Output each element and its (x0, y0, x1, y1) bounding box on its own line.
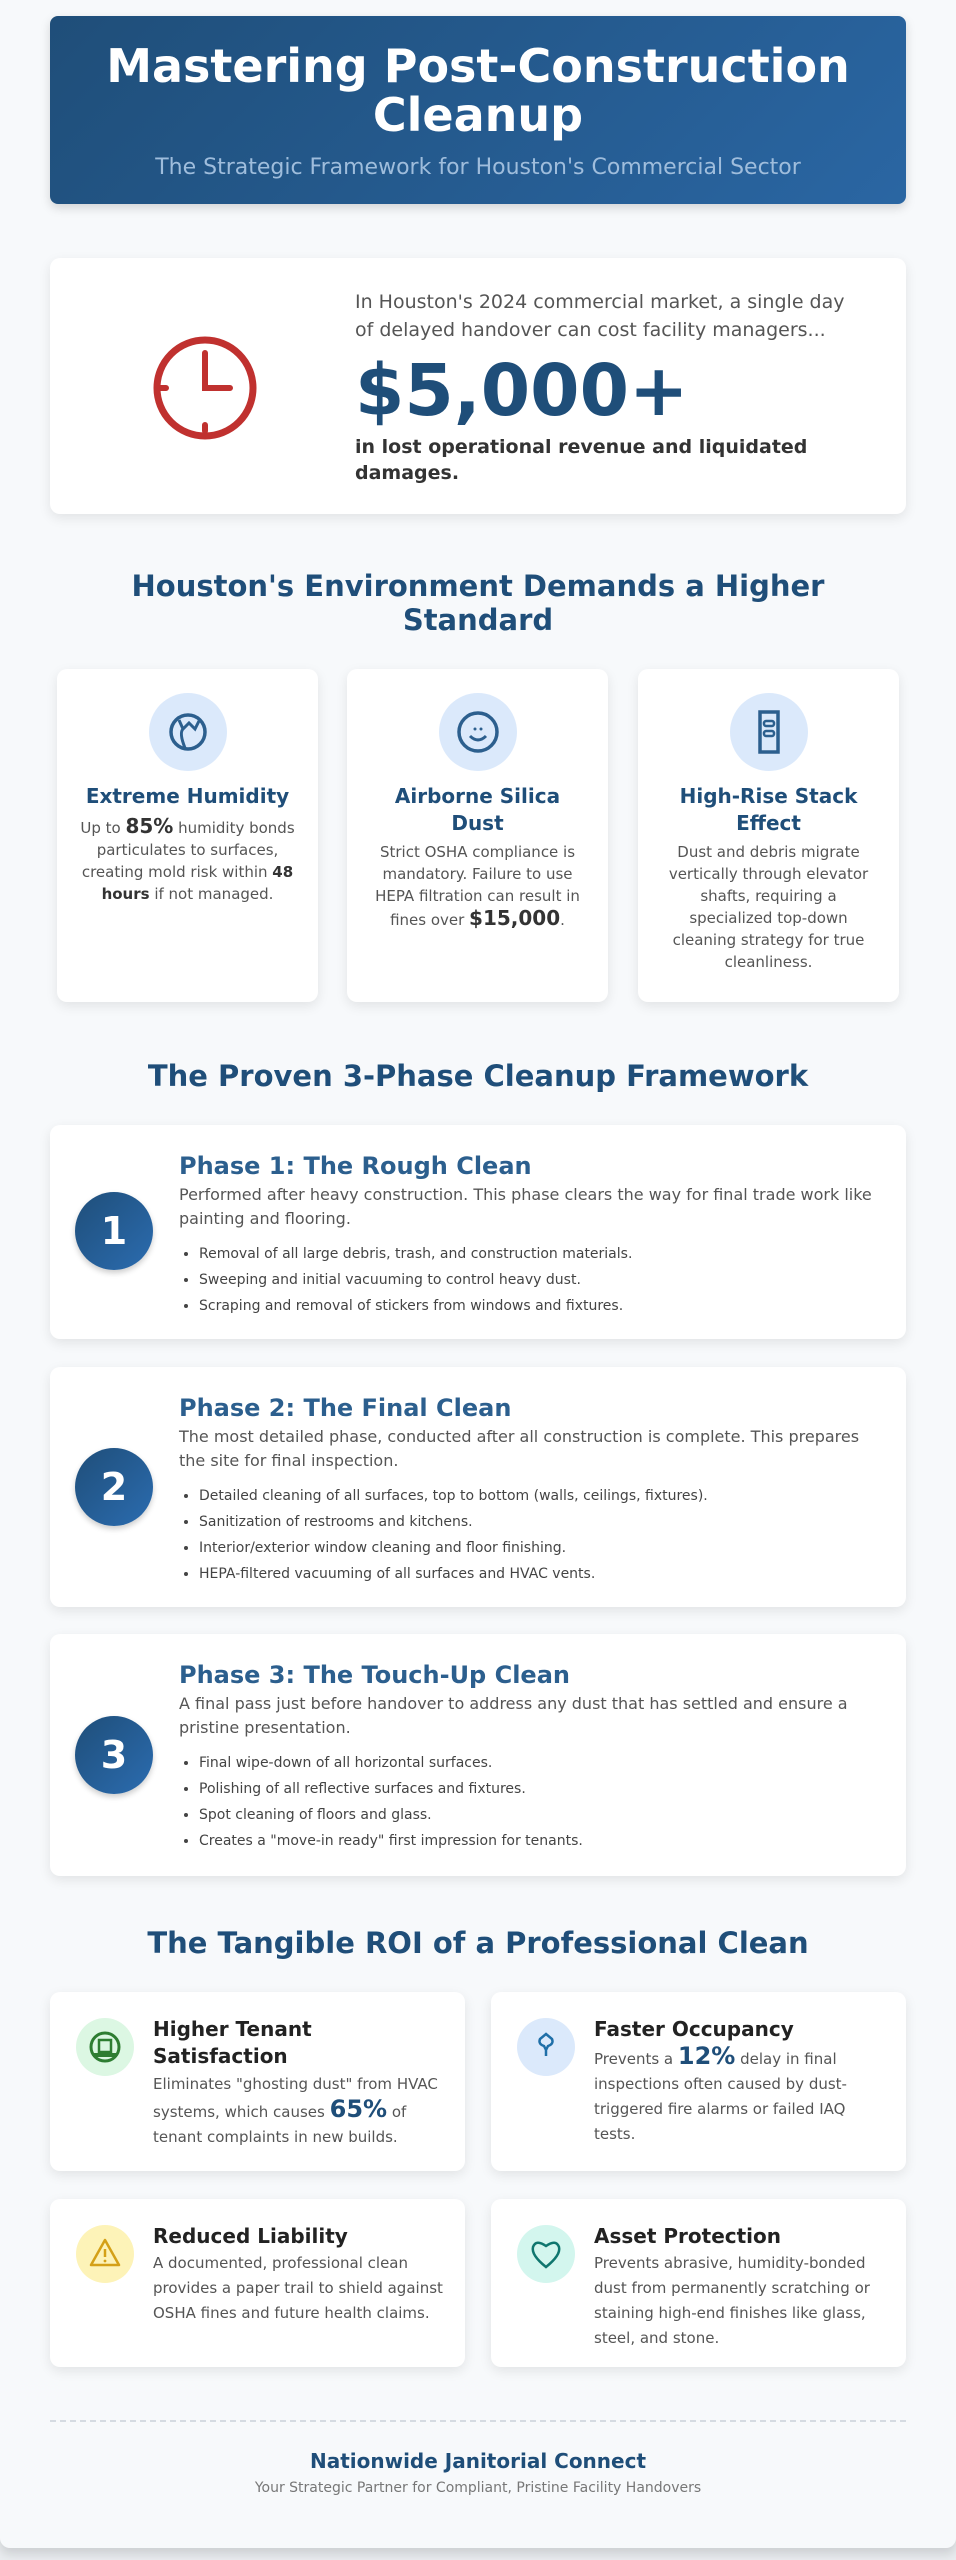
panel: phase 2: Interior/exterior window cleaning and floor finishing. (199, 1540, 566, 1556)
panel: silica (347, 669, 608, 1002)
panel: reduced liability (50, 2199, 465, 2367)
panel: phase 1: Sweeping and initial vacuuming to control heavy dust. (199, 1272, 581, 1288)
panel: silica: Airborne Silica (395, 784, 560, 808)
panel: phase 2: Detailed cleaning of all surfaces, top to bottom (walls, ceilings, fixtures). (199, 1488, 708, 1504)
panel: phase 2: Sanitization of restrooms and kitchens. (199, 1514, 473, 1530)
panel: faster occupancy: Faster Occupancy (594, 2017, 794, 2041)
panel: faster occupancy (491, 1992, 906, 2171)
stat text (355, 291, 844, 484)
panel: stack effect: Dust and debris migrate vertically through elevator shafts, requiring a specialized top-down cleaning strategy for true cleanliness. (669, 843, 868, 971)
title: Mastering Post-Construction (106, 39, 850, 93)
panel: phase 3 (50, 1634, 906, 1876)
panel: phase 1: Performed after heavy construction. This phase clears the way for final trade work like painting and flooring. (179, 1185, 872, 1228)
panel: phase 3: Spot cleaning of floors and glass. (199, 1807, 432, 1823)
panel: phase 2: Phase 2: The Final Clean (179, 1394, 511, 1422)
panel: phase 2: HEPA-filtered vacuuming of all surfaces and HVAC vents. (199, 1566, 595, 1582)
number 3: 3 (101, 1733, 127, 1777)
stat text: $5,000+ (355, 349, 688, 432)
number 2 (75, 1448, 153, 1526)
panel: silica: Dust (451, 811, 504, 835)
panel: stack effect (638, 669, 899, 1002)
icon: humidity (149, 693, 227, 771)
panel: asset protection: Asset Protection (594, 2224, 781, 2248)
panel: tenant satisfaction: Eliminates "ghosting dust" from HVAC systems, which causes 65% of tenant complaints in new builds. (153, 2075, 438, 2146)
panel: reduced liability: A documented, professional clean provides a paper trail to shield against OSHA fines and future health claims. (153, 2254, 443, 2322)
panel: reduced liability: Reduced Liability (153, 2224, 348, 2248)
icon: blue (517, 2018, 575, 2076)
title (106, 39, 850, 142)
panel: phase 1: Removal of all large debris, trash, and construction materials. (199, 1246, 632, 1262)
footer (50, 2420, 906, 2510)
title: Cleanup (373, 88, 583, 142)
panel: phase 3: Polishing of all reflective surfaces and fixtures. (199, 1781, 526, 1797)
number 1 (75, 1192, 153, 1270)
panel: phase 3: Phase 3: The Touch-Up Clean (179, 1661, 570, 1689)
panel: humidity: Extreme Humidity (86, 784, 289, 808)
icon: heart (517, 2225, 575, 2283)
panel: phase 3: A final pass just before handover to address any dust that has settled and ensure a pristine presentation. (179, 1694, 848, 1737)
stat text: In Houston's 2024 commercial market, a single day of delayed handover can cost facility managers... (355, 291, 844, 341)
icon: building (730, 693, 808, 771)
number 3 (75, 1716, 153, 1794)
panel: asset protection: Prevents abrasive, humidity-bonded dust from permanently scratching or staining high-end finishes like glass, steel, and stone. (594, 2254, 870, 2347)
heading: ROI: The Tangible ROI of a Professional Clean (147, 1926, 809, 1960)
panel: asset protection (491, 2199, 906, 2367)
icon: green (76, 2018, 134, 2076)
header banner (50, 16, 906, 204)
subtitle: The Strategic Framework for Houston's Commercial Sector (155, 155, 801, 180)
stat text: in lost operational revenue and liquidated damages. (355, 436, 807, 484)
panel: silica: Strict OSHA compliance is mandatory. Failure to use HEPA filtration can result in fines over $15,000. (375, 843, 580, 930)
panel: tenant satisfaction: Higher Tenant (153, 2017, 312, 2041)
footer: Nationwide Janitorial Connect (310, 2449, 646, 2473)
panel: tenant satisfaction (50, 1992, 465, 2171)
panel: phase 1 (50, 1125, 906, 1339)
panel: stack effect: Effect (736, 811, 801, 835)
panel: phase 2 (50, 1367, 906, 1607)
panel: faster occupancy: Prevents a 12% delay in final inspections often caused by dust-triggered fire alarms or failed IAQ tests. (594, 2042, 847, 2143)
panel: humidity (57, 669, 318, 1002)
panel: phase 1: Phase 1: The Rough Clean (179, 1152, 532, 1180)
panel: stack effect: High-Rise Stack (680, 784, 857, 808)
icon: clock (154, 336, 256, 440)
panel: humidity: Up to 85% humidity bonds particulates to surfaces, creating mold risk within 48 hours if not managed. (80, 814, 295, 903)
panel: phase 3: Creates a "move-in ready" first impression for tenants. (199, 1833, 583, 1849)
number 2: 2 (101, 1465, 127, 1509)
icon: warning (76, 2225, 134, 2283)
panel: phase 3: Final wipe-down of all horizontal surfaces. (199, 1755, 492, 1771)
heading: environment: Houston's Environment Demands a Higher (132, 569, 824, 603)
number 1: 1 (101, 1209, 127, 1253)
heading: environment (132, 569, 824, 637)
panel: phase 2: The most detailed phase, conducted after all construction is complete. This prepares the site for final inspection. (179, 1427, 859, 1470)
heading: environment: Standard (403, 603, 553, 637)
panel: tenant satisfaction: Satisfaction (153, 2044, 288, 2068)
icon: face (439, 693, 517, 771)
stat card (50, 258, 906, 514)
footer: Your Strategic Partner for Compliant, Pristine Facility Handovers (255, 2480, 701, 2496)
heading: framework: The Proven 3-Phase Cleanup Framework (148, 1059, 808, 1093)
panel: phase 1: Scraping and removal of stickers from windows and fixtures. (199, 1298, 623, 1314)
